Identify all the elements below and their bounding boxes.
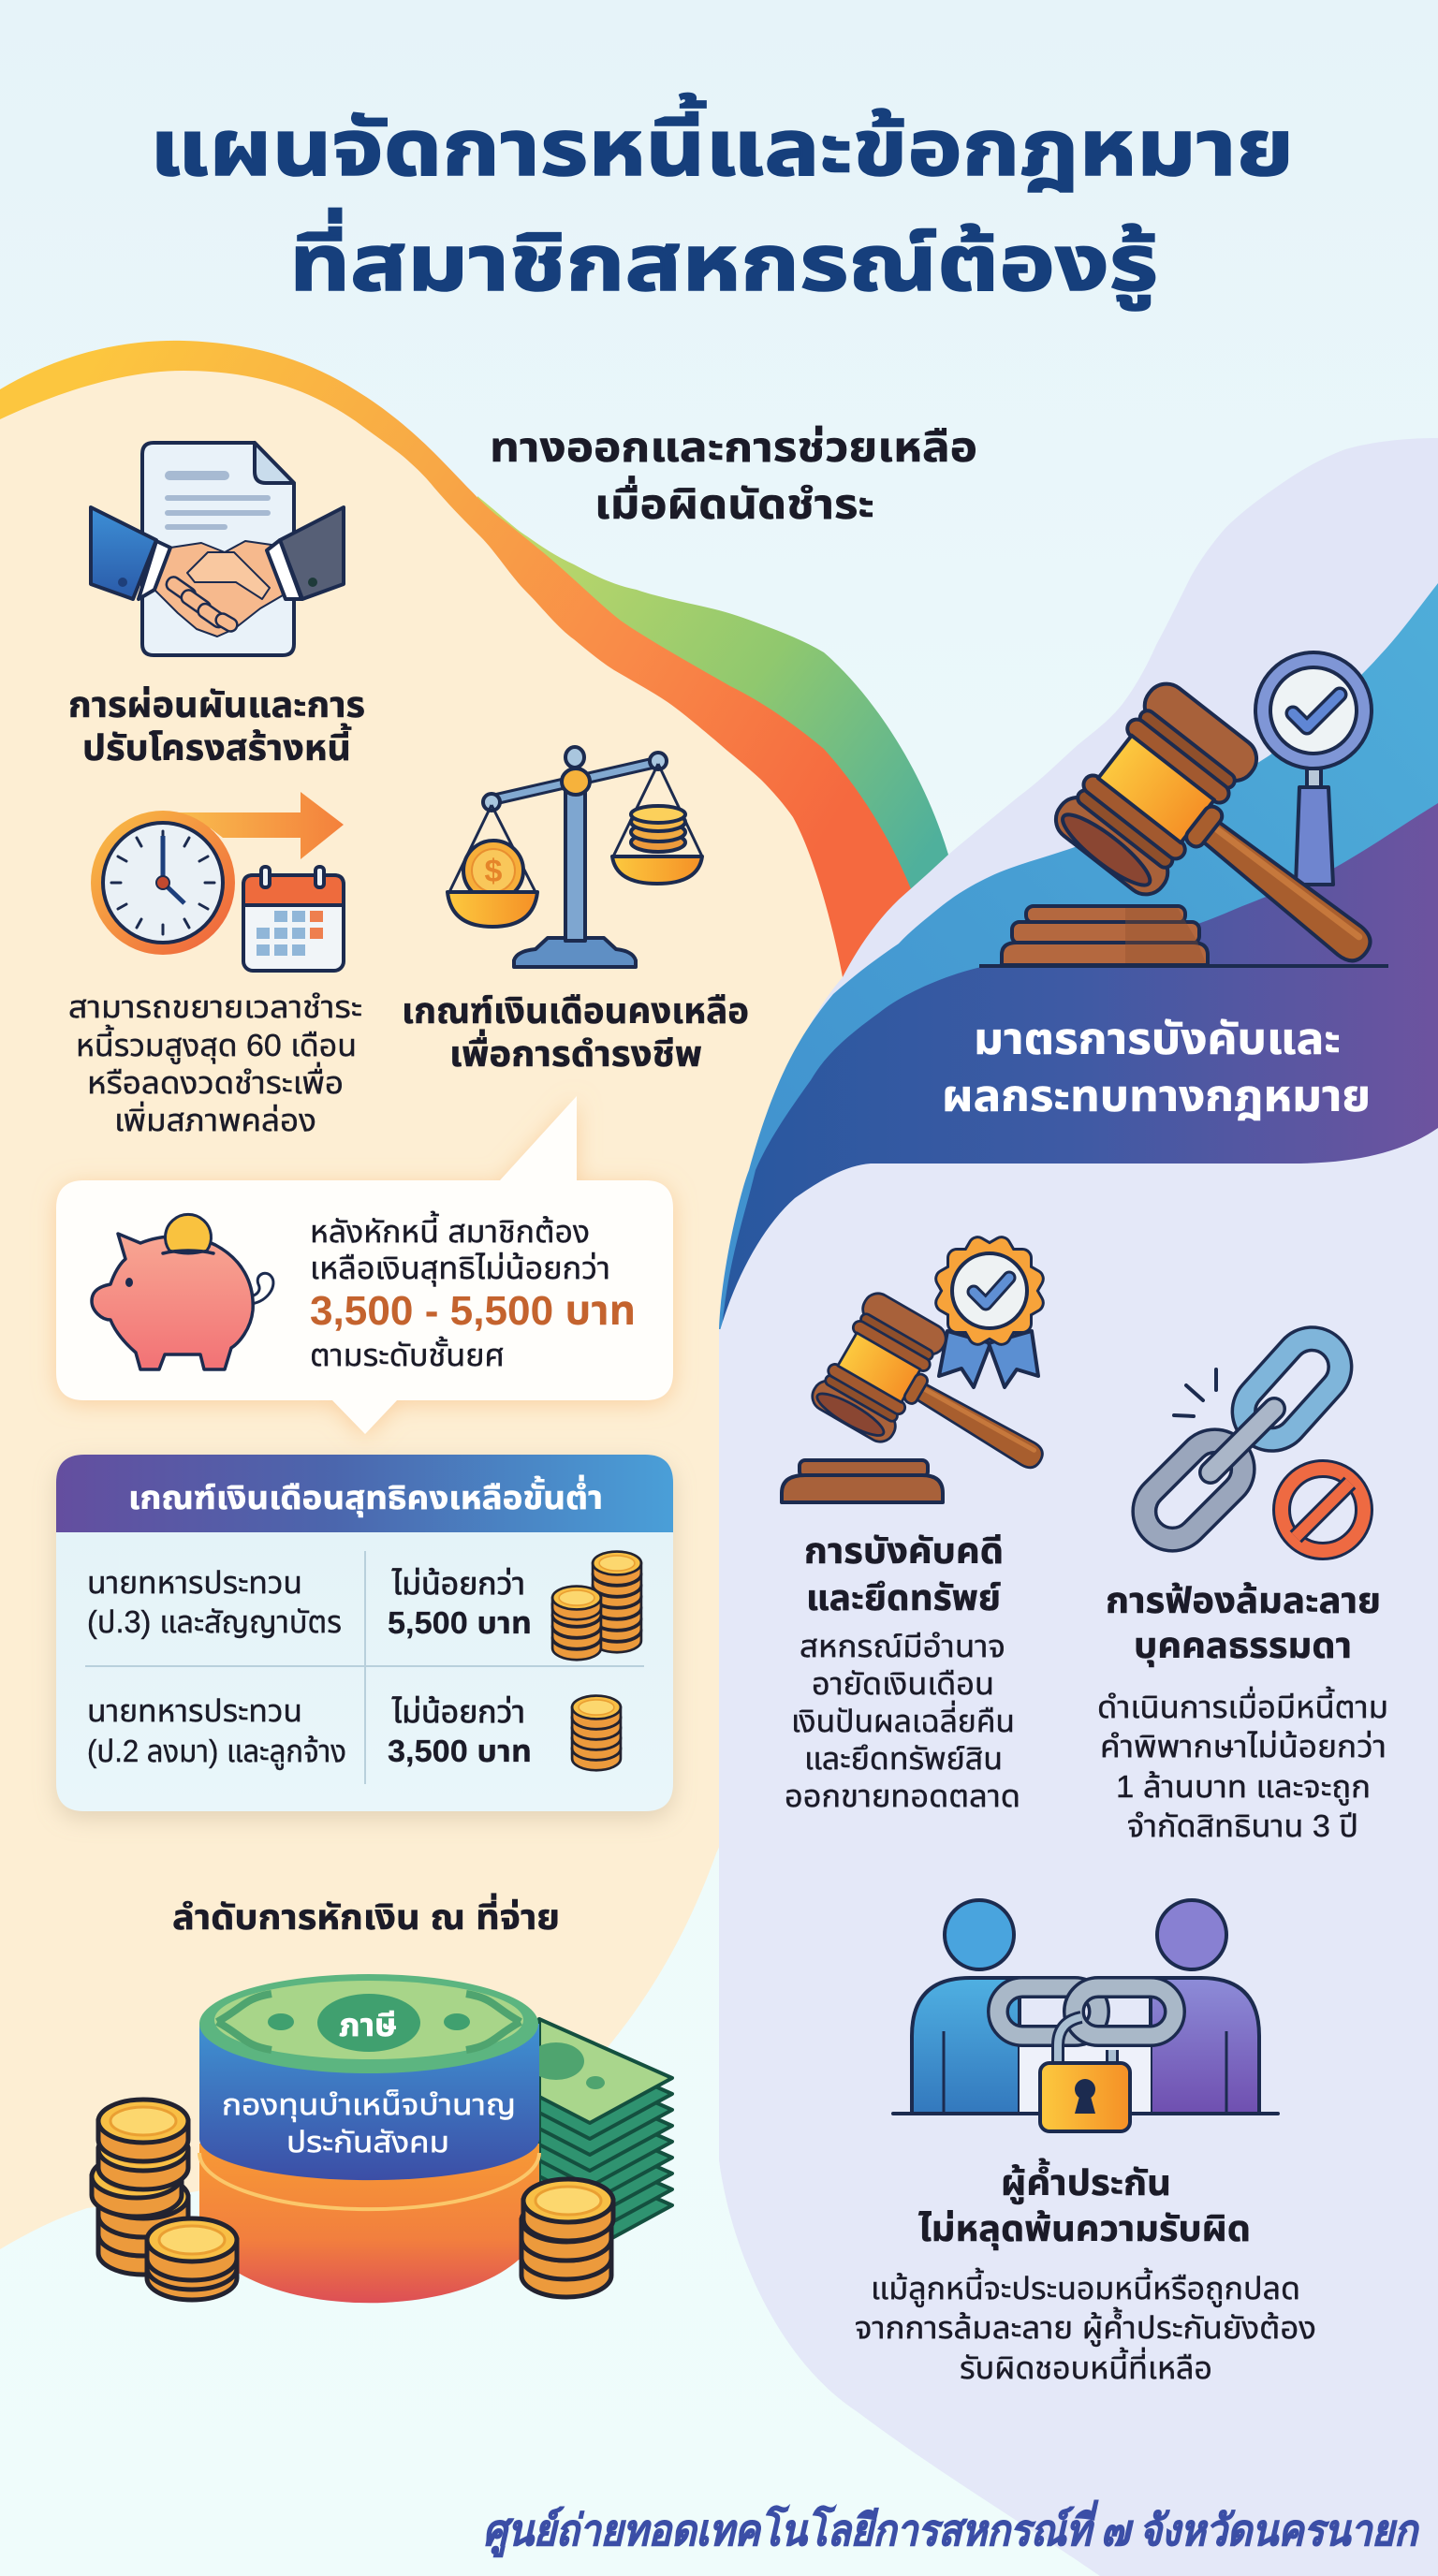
heading: remaining salary criteria (402, 992, 749, 1075)
heading: remaining salary criteria: เกณฑ์เงินเดือนคงเหลือ (402, 992, 749, 1032)
icon: left coin stacks (92, 2100, 237, 2300)
text: extend repayment: หนี้รวมสูงสุด 60 เดือน (76, 1024, 357, 1064)
row 2 amount: ไม่น้อยกว่า (391, 1694, 525, 1729)
wave: yellow to orange band (0, 341, 912, 1123)
title (150, 93, 1294, 311)
panel: right lavender wave (719, 438, 1438, 2576)
row 1 amount: ไม่น้อยกว่า (391, 1566, 525, 1601)
panel: banner background (723, 803, 1438, 1329)
heading: banner enforcement measures (942, 1014, 1371, 1120)
heading: debt restructuring (68, 686, 365, 768)
label: tax: ภาษี (339, 2008, 397, 2043)
heading: guarantor not released: ไม่หลุดพ้นความรับผิด (918, 2210, 1251, 2250)
text: guarantor body: จากการล้มละลาย ผู้ค้ำประกันยังต้อง (855, 2306, 1316, 2347)
row 2 rank (87, 1693, 346, 1770)
icon: balance scale (448, 747, 702, 967)
magnifier (1255, 652, 1372, 885)
heading: banner enforcement measures: มาตรการบังคับและ (974, 1014, 1341, 1063)
heading: exits and help (490, 425, 977, 528)
heading: banner enforcement measures: ผลกระทบทางกฎหมาย (942, 1071, 1371, 1120)
icon: right coin stack (521, 2179, 613, 2297)
heading: case enforcement: และยึดทรัพย์ (806, 1579, 1001, 1618)
heading: case enforcement (804, 1532, 1004, 1618)
text: enforcement body (785, 1629, 1020, 1813)
gavel base (782, 1460, 943, 1502)
padlock (1040, 2063, 1130, 2131)
text: guarantor body (855, 2267, 1316, 2385)
icon: balance scale: $ (485, 854, 503, 889)
panel: left peach background (0, 371, 843, 2249)
icon: coin stacks row 1 (552, 1552, 641, 1660)
wave: green band (468, 496, 948, 1048)
row 2 rank: นายทหารประทวน (87, 1693, 302, 1728)
heading: exits and help: เมื่อผิดนัดชำระ (594, 476, 874, 528)
label: funds: ประกันสังคม (286, 2126, 449, 2159)
heading: personal bankruptcy: บุคคลธรรมดา (1134, 1627, 1352, 1667)
text: net remaining: 3,500 - 5,500 บาท (310, 1288, 636, 1334)
text: extend repayment (68, 989, 362, 1137)
table heading: เกณฑ์เงินเดือนสุทธิคงเหลือขั้นต่ำ (128, 1474, 603, 1517)
text: bankruptcy body: 1 ล้านบาท และจะถูก (1116, 1769, 1371, 1806)
heading: personal bankruptcy: การฟ้องล้มละลาย (1106, 1582, 1381, 1621)
text: net remaining: หลังหักหนี้ สมาชิกต้อง (310, 1210, 590, 1249)
text: bankruptcy body (1097, 1686, 1388, 1843)
heading: exits and help: ทางออกและการช่วยเหลือ (490, 425, 977, 471)
icon: coin stack row 2 (572, 1696, 621, 1770)
text: net remaining (310, 1210, 636, 1372)
label: funds: กองทุนบำเหน็จบำนาญ (222, 2088, 516, 2122)
title: ที่สมาชิกสหกรณ์ต้องรู้ (289, 208, 1158, 311)
text: enforcement body: อายัดเงินเดือน (812, 1666, 994, 1701)
row 1 rank (87, 1565, 342, 1639)
text: guarantor body: รับผิดชอบหนี้ที่เหลือ (960, 2347, 1212, 2385)
heading: remaining salary criteria: เพื่อการดำรงชีพ (449, 1029, 702, 1075)
heading: case enforcement: การบังคับคดี (804, 1532, 1004, 1572)
icon: piggy bank (92, 1214, 273, 1369)
text: bankruptcy body: จำกัดสิทธินาน 3 ปี (1127, 1808, 1358, 1843)
callout: net remaining money (56, 1096, 673, 1434)
row 1 rank: นายทหารประทวน (87, 1565, 302, 1600)
text: bankruptcy body: ดำเนินการเมื่อมีหนี้ตาม (1097, 1686, 1388, 1724)
row 1 amount: 5,500 บาท (388, 1605, 532, 1640)
row 2 amount: 3,500 บาท (388, 1734, 532, 1768)
row 2 amount (388, 1694, 532, 1768)
icon: main gavel and magnifier (979, 652, 1423, 1027)
icon: clock with arrow and calendar (91, 792, 344, 971)
row 2 rank: (ป.2 ลงมา) และลูกจ้าง (87, 1734, 346, 1770)
heading: guarantor not released (918, 2158, 1251, 2250)
text: extend repayment: หรือลดงวดชำระเพื่อ (87, 1061, 344, 1100)
label: funds (222, 2088, 516, 2159)
icon: gavel and rosette (782, 1236, 1073, 1517)
icon: handshake on document (91, 443, 344, 655)
gavel sound block (979, 906, 1388, 968)
chart: deduction order cylinder (199, 1974, 539, 2303)
icon: cash stack (528, 2019, 672, 2250)
panel: right lower lavender (719, 1128, 1438, 2576)
text: enforcement body: และยึดทรัพย์สิน (804, 1741, 1003, 1776)
text: guarantor body: แม้ลูกหนี้จะประนอมหนี้หรือถูกปลด (871, 2267, 1300, 2307)
icon: guarantor people chained with padlock (891, 1900, 1280, 2131)
text: bankruptcy body: คำพิพากษาไม่น้อยกว่า (1100, 1729, 1387, 1764)
text: extend repayment: สามารถขยายเวลาชำระ (68, 989, 362, 1024)
row 1 rank: (ป.3) และสัญญาบัตร (87, 1604, 342, 1639)
heading: debt restructuring: ปรับโครงสร้างหนี้ (82, 723, 352, 768)
text: net remaining: เหลือเงินสุทธิไม่น้อยกว่า (310, 1251, 610, 1287)
icon: broken chain and prohibition (1133, 1327, 1364, 1551)
title: แผนจัดการหนี้และข้อกฎหมาย (150, 93, 1294, 192)
table: minimum remaining net salary (56, 1455, 673, 1811)
heading: debt restructuring: การผ่อนผันและการ (68, 686, 365, 725)
wave: blue band (719, 583, 1438, 1329)
text: net remaining: ตามระดับชั้นยศ (310, 1336, 505, 1372)
text: enforcement body: เงินปันผลเฉลี่ยคืน (791, 1700, 1015, 1738)
text: enforcement body: ออกขายทอดตลาด (785, 1778, 1020, 1813)
rosette (934, 1236, 1045, 1387)
heading: guarantor not released: ผู้ค้ำประกัน (1001, 2158, 1171, 2204)
heading: deduction order: ลำดับการหักเงิน ณ ที่จ่าย (172, 1893, 560, 1937)
heading: personal bankruptcy (1106, 1582, 1381, 1667)
text: extend repayment: เพิ่มสภาพคล่อง (114, 1101, 316, 1137)
text: enforcement body: สหกรณ์มีอำนาจ (800, 1629, 1005, 1663)
row 1 amount (388, 1566, 532, 1640)
